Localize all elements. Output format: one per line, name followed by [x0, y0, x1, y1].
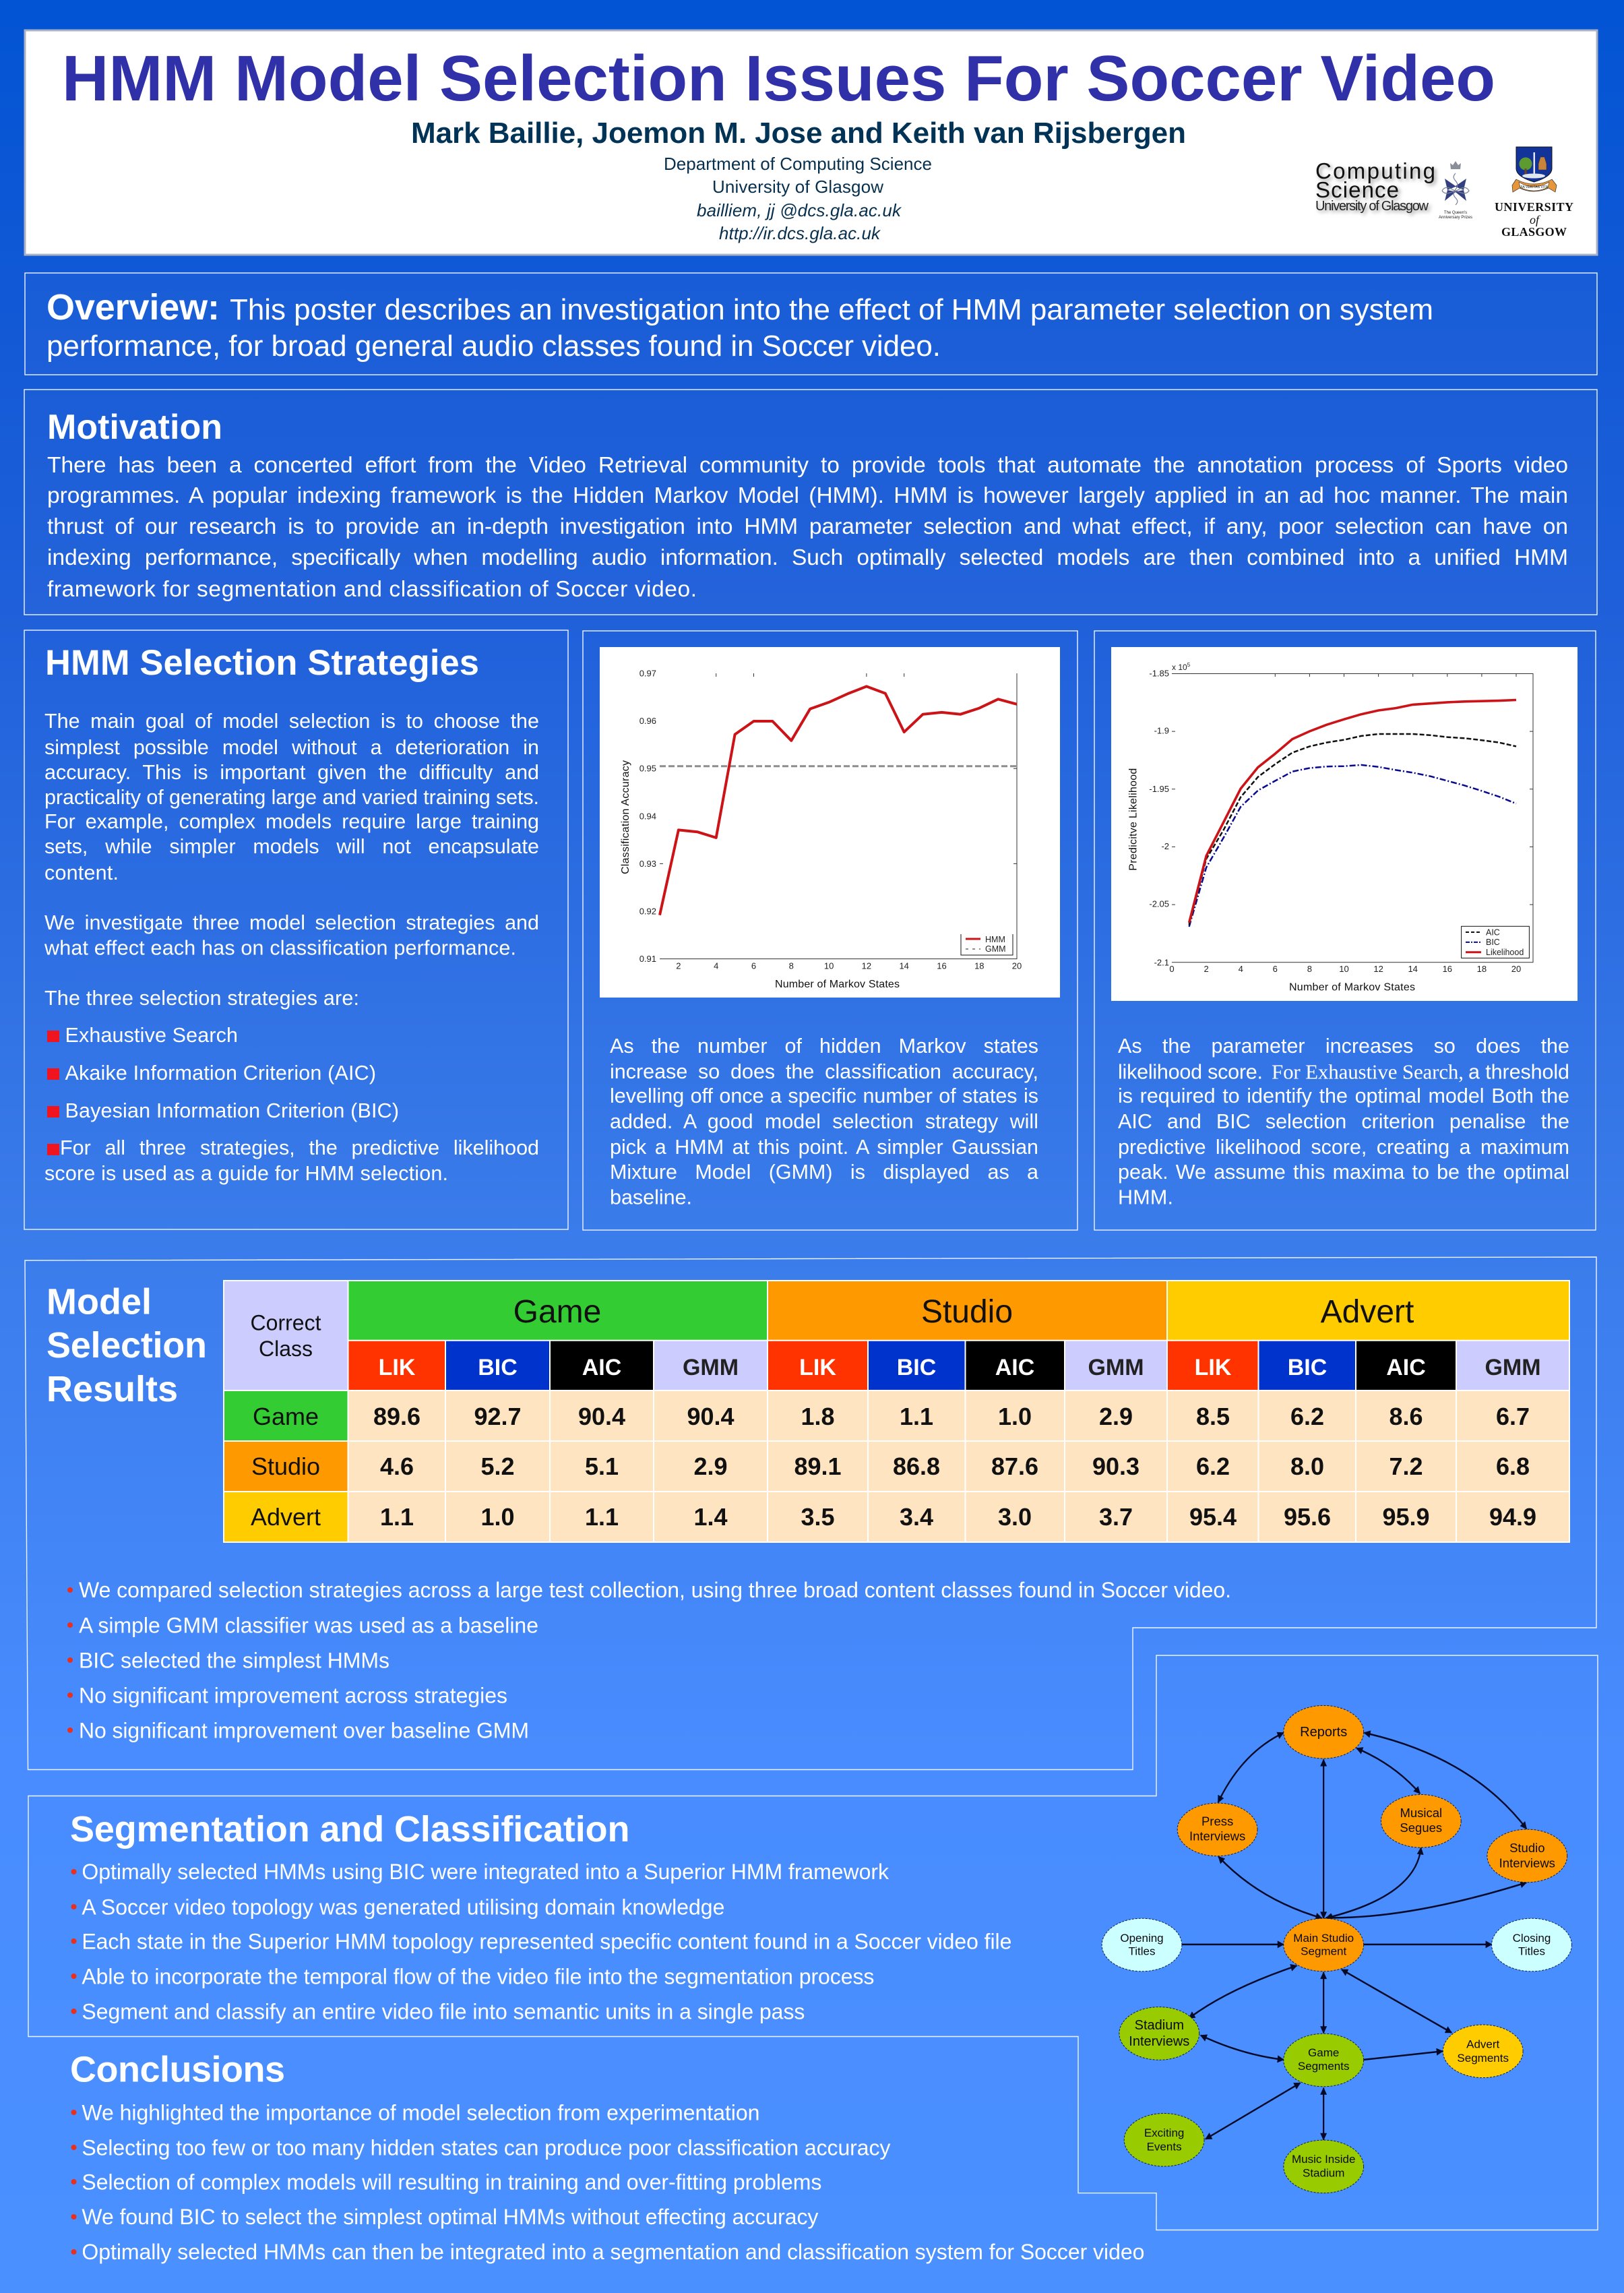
axis labels: 10 [1339, 964, 1349, 974]
strategy sub-headers: GMM [1088, 1355, 1144, 1380]
legend: BIC [1486, 938, 1500, 947]
authors: Mark Baillie, Joemon M. Jose and Keith van Rijsbergen [411, 117, 1186, 150]
logo: university of glasgow crest: of [1530, 213, 1541, 226]
row: advert: 1.1 [380, 1503, 414, 1531]
line chart: accuracy vs markov states [600, 647, 1060, 998]
axis labels: 18 [974, 961, 985, 971]
strategies paragraph 2: what effect each has on classification performance. [44, 937, 516, 960]
results heading [46, 1282, 207, 1409]
row: game: 2.9 [1099, 1403, 1133, 1430]
section: segmentation and classification [70, 1809, 1011, 2023]
conclusions bullet list: We found BIC to select the simplest optimal HMMs without effecting accuracy [82, 2205, 818, 2229]
results bullet list: No significant improvement over baseline GMM [79, 1719, 529, 1743]
segmentation bullet list: Optimally selected HMMs using BIC were integrated into a Superior HMM framework [82, 1860, 889, 1884]
strategy sub-headers [348, 1341, 1569, 1390]
group headers: Advert [1321, 1294, 1414, 1330]
axis labels: 0.93 [639, 859, 656, 869]
node: closing titles: Closing [1513, 1932, 1551, 1945]
axis labels: 8 [1307, 964, 1312, 974]
strategy sub-headers: GMM [683, 1355, 739, 1380]
caption: likelihood chart: is required to identify the optimal model Both the [1118, 1084, 1569, 1107]
node: studio interviews [1487, 1829, 1567, 1883]
motivation text: There has been a concerted effort from the Video Retrieval community to provide tools that automate the annotation process of Sports video [47, 453, 1568, 478]
row: studio: 6.2 [1196, 1453, 1230, 1480]
results heading: Model [46, 1282, 152, 1322]
caption: likelihood chart: For Exhaustive Search, [1272, 1060, 1464, 1084]
strategy sub-headers: LIK [379, 1355, 416, 1380]
bullet: predictive likelihood note: For all three strategies, the predictive likelihood [60, 1136, 539, 1159]
strategies paragraph 1: simplest possible model without a deterioration in [44, 736, 539, 759]
axis labels: -1.95 [1149, 784, 1169, 794]
conclusions bullet list [71, 2100, 1144, 2264]
legend: Likelihood [1486, 948, 1524, 957]
strategy sub-headers: LIK [799, 1355, 836, 1380]
axis labels: -2 [1161, 841, 1169, 851]
results heading: Results [46, 1369, 178, 1409]
affiliation: http://ir.dcs.gla.ac.uk [719, 223, 881, 243]
row: game: 6.2 [1290, 1403, 1324, 1430]
axis labels: 4 [1239, 964, 1243, 974]
row: advert [380, 1503, 1536, 1531]
row: studio: 5.2 [480, 1453, 515, 1480]
segmentation bullet list: Segment and classify an entire video file into semantic units in a single pass [82, 1999, 805, 2023]
axis labels: 14 [1408, 964, 1418, 974]
network diagram: superior hmm topology [1102, 1705, 1571, 2193]
axis labels: -1.85 [1149, 669, 1169, 678]
node: game segments [1284, 2034, 1364, 2087]
axis labels: 0.91 [639, 954, 656, 964]
strategies paragraph 1: content. [44, 861, 119, 884]
axis labels: 16 [1443, 964, 1452, 974]
node: game segments: Segments [1298, 2060, 1349, 2073]
row: game: 8.5 [1196, 1403, 1230, 1430]
row: studio: 8.0 [1290, 1453, 1324, 1480]
strategies list [44, 987, 539, 1185]
row: game: 6.7 [1496, 1403, 1530, 1430]
caption: accuracy chart [610, 1034, 1038, 1209]
row: advert: 95.9 [1382, 1503, 1430, 1531]
axis labels: 20 [1012, 961, 1022, 971]
conclusions bullet list: Selecting too few or too many hidden states can produce poor classification accuracy [82, 2135, 890, 2160]
strategy sub-headers: BIC [478, 1355, 518, 1380]
node: studio interviews: Studio [1509, 1841, 1545, 1855]
row: game: 92.7 [474, 1403, 522, 1430]
results heading: Selection [46, 1325, 207, 1366]
row: advert: 1.4 [693, 1503, 728, 1531]
row: studio: 4.6 [380, 1453, 414, 1480]
row: advert: 3.0 [998, 1503, 1032, 1531]
row: advert: 3.5 [801, 1503, 835, 1531]
row headers [224, 1390, 348, 1542]
logo: queen's anniversary prize emblem: Anniversary Prizes [1439, 216, 1472, 220]
strategies heading: HMM Selection Strategies [45, 643, 479, 683]
node: musical segues: Musical [1400, 1806, 1442, 1820]
row: game: 1.1 [900, 1403, 933, 1430]
node: press interviews: Interviews [1189, 1829, 1245, 1843]
caption: likelihood chart: As the parameter increases so does the [1118, 1035, 1569, 1058]
group headers [348, 1281, 1569, 1341]
affiliation [664, 154, 932, 243]
axis labels: 6 [751, 961, 756, 971]
row: advert: 3.7 [1099, 1503, 1133, 1531]
axis labels: -2.05 [1149, 899, 1169, 909]
results table [224, 1281, 1569, 1542]
logo: university of glasgow crest: GLASGOW [1501, 225, 1567, 239]
segmentation bullet list: Each state in the Superior HMM topology represented specific content found in a Soccer video file [82, 1930, 1011, 1954]
node: studio interviews: Interviews [1499, 1856, 1555, 1870]
strategy sub-headers: AIC [1386, 1355, 1426, 1380]
node: musical segues: Segues [1400, 1821, 1442, 1835]
row: studio: 86.8 [893, 1453, 940, 1480]
row: studio: 5.1 [585, 1453, 619, 1480]
axis labels: 0.95 [639, 764, 656, 774]
segmentation bullet list: Able to incorporate the temporal flow of the video file into the segmentation process [82, 1965, 874, 1989]
panel: segmentation, conclusions and topology outline [28, 1655, 1598, 2230]
node: press interviews [1177, 1803, 1257, 1856]
caption: likelihood chart: HMM. [1118, 1186, 1173, 1209]
strategies paragraph 1: The main goal of model selection is to choose the [44, 710, 539, 733]
node: music inside stadium [1284, 2140, 1364, 2193]
row: game: 89.6 [373, 1403, 420, 1430]
node: main studio segment: Main Studio [1293, 1932, 1354, 1945]
panel: overview [25, 273, 1597, 375]
segmentation heading: Segmentation and Classification [70, 1809, 629, 1849]
conclusions bullet list: Selection of complex models will resulting in training and over-fitting problems [82, 2170, 821, 2195]
bullet: predictive likelihood note: score is used as a guide for HMM selection. [44, 1162, 448, 1185]
axis labels: -1.9 [1154, 725, 1169, 735]
bullet: bic: Bayesian Information Criterion (BIC) [65, 1099, 399, 1122]
section: conclusions [70, 2049, 1144, 2264]
logo: computing science: Computing [1315, 158, 1435, 183]
axis labels: 0.94 [639, 811, 656, 821]
motivation text: programmes. A popular indexing framework is the Hidden Markov Model (HMM). HMM is however largely applied in an ad hoc manner. The main [47, 483, 1568, 508]
row: game: 90.4 [687, 1403, 735, 1430]
logo: university of glasgow crest: UNIVERSITY [1495, 200, 1573, 214]
strategies paragraph 1: accuracy. This is important given the difficulty and [44, 761, 539, 784]
axis labels: 18 [1477, 964, 1487, 974]
caption: likelihood chart: predictive likelihood score, creating a maximum [1118, 1136, 1569, 1159]
axis labels: 14 [899, 961, 909, 971]
segmentation bullet list [71, 1860, 1011, 2023]
legend [1462, 926, 1529, 958]
node: opening titles: Titles [1128, 1945, 1155, 1957]
strategies paragraph 2: We investigate three model selection strategies and [44, 911, 539, 934]
axis labels: 12 [862, 961, 871, 971]
row: advert: 1.1 [585, 1503, 619, 1531]
logo: computing science: University of Glasgow [1315, 199, 1429, 214]
conclusions bullet list: We highlighted the importance of model selection from experimentation [82, 2100, 759, 2124]
axis labels: 4 [714, 961, 718, 971]
axis labels: Number of Markov States [775, 979, 900, 990]
axis labels: x 10 [1172, 663, 1187, 672]
overview heading: Overview: [46, 287, 220, 328]
overview text: This poster describes an investigation into the effect of HMM parameter selection on system [230, 293, 1433, 326]
strategy sub-headers: GMM [1485, 1355, 1541, 1380]
row: studio [380, 1453, 1530, 1480]
row: game: 90.4 [578, 1403, 625, 1430]
strategy sub-headers: AIC [995, 1355, 1034, 1380]
motivation text: indexing performance, specifically when modelling audio information. Such optimally selected models are then combined into a unified HMM [47, 545, 1568, 570]
logo: computing science: Science [1315, 177, 1399, 202]
logo: university of glasgow crest [1495, 147, 1573, 239]
axis labels: 0.97 [639, 669, 656, 678]
caption: likelihood chart: AIC and BIC selection criterion penalise the [1118, 1110, 1569, 1133]
row: studio: 7.2 [1389, 1453, 1423, 1480]
legend: GMM [985, 944, 1006, 954]
node: advert segments: Segments [1457, 2052, 1509, 2065]
conclusions heading: Conclusions [70, 2049, 285, 2089]
row: advert: 3.4 [900, 1503, 933, 1531]
header panel [25, 30, 1597, 255]
hmm line [660, 686, 1017, 915]
logo: computing science [1315, 158, 1435, 214]
node: exciting events: Exciting [1144, 2127, 1184, 2139]
aic curve [1189, 734, 1516, 925]
strategy sub-headers: LIK [1195, 1355, 1232, 1380]
axis labels: -2.1 [1154, 957, 1169, 967]
axis labels: 2 [676, 961, 681, 971]
node: musical segues [1381, 1794, 1461, 1847]
panel: hmm selection strategies [24, 630, 568, 1229]
node: main studio segment [1284, 1918, 1364, 1971]
node: closing titles [1492, 1918, 1571, 1971]
axis labels: Number of Markov States [1289, 982, 1415, 993]
row: game: 8.6 [1389, 1403, 1423, 1430]
node: opening titles: Opening [1120, 1932, 1164, 1945]
row headers: Advert [251, 1503, 321, 1531]
node: press interviews: Press [1201, 1814, 1233, 1829]
arrows [1182, 1733, 1526, 2140]
node: opening titles [1102, 1918, 1182, 1971]
affiliation: Department of Computing Science [664, 154, 932, 174]
node: reports: Reports [1300, 1725, 1347, 1740]
likelihood curve [1189, 700, 1516, 923]
row: advert: 95.4 [1189, 1503, 1237, 1531]
node: advert segments [1443, 2025, 1523, 2078]
axis labels: 0.96 [639, 716, 656, 726]
axis labels: Predicitve Likelihood [1128, 768, 1139, 871]
caption: accuracy chart: pick a HMM at this point. A simpler Gaussian [610, 1136, 1038, 1159]
correct class header: Class [259, 1337, 313, 1361]
caption: accuracy chart: baseline. [610, 1186, 692, 1209]
row: advert: 1.0 [480, 1503, 515, 1531]
bic curve [1189, 765, 1516, 927]
results bullet list: No significant improvement across strategies [79, 1684, 507, 1708]
overview text: performance, for broad general audio classes found in Soccer video. [46, 330, 941, 363]
node: music inside stadium: Stadium [1303, 2166, 1344, 2179]
caption: likelihood chart: a threshold [1468, 1061, 1569, 1084]
results bullet list [67, 1578, 1231, 1743]
caption: accuracy chart: Mixture Model (GMM) is displayed as a [610, 1161, 1038, 1184]
row: studio: 87.6 [991, 1453, 1038, 1480]
affiliation: bailliem, jj @dcs.gla.ac.uk [697, 200, 902, 220]
axis labels [1128, 662, 1521, 993]
axis labels: 12 [1373, 964, 1383, 974]
line chart: likelihood vs markov states [1111, 647, 1578, 1001]
caption: accuracy chart: levelling off once a specific number of states is [610, 1084, 1038, 1107]
strategy sub-headers: AIC [582, 1355, 621, 1380]
bullet: exhaustive search: Exhaustive Search [65, 1024, 238, 1047]
row: studio: 89.1 [794, 1453, 842, 1480]
correct class header [224, 1281, 348, 1390]
legend: AIC [1486, 927, 1500, 937]
caption: accuracy chart: As the number of hidden Markov states [610, 1035, 1038, 1058]
caption: accuracy chart: increase so does the classification accuracy, [610, 1060, 1038, 1083]
axis labels: 8 [789, 961, 794, 971]
caption: likelihood chart [1118, 1034, 1569, 1209]
axis labels: 5 [1187, 662, 1191, 668]
panel: classification accuracy chart [583, 631, 1078, 1230]
node: stadium interviews [1119, 2007, 1199, 2060]
node: reports [1284, 1705, 1364, 1759]
caption: likelihood chart: peak. We assume this maxima to be the optimal [1118, 1161, 1569, 1184]
row: advert: 94.9 [1489, 1503, 1536, 1531]
results bullet list: A simple GMM classifier was used as a baseline [79, 1613, 538, 1637]
legend: HMM [985, 935, 1005, 944]
strategies paragraph 2 [44, 911, 539, 960]
strategies list: The three selection strategies are: [44, 987, 359, 1010]
axis labels: Classification Accuracy [620, 760, 631, 874]
node: advert segments: Advert [1466, 2038, 1500, 2051]
node: music inside stadium: Music Inside [1292, 2153, 1355, 2166]
affiliation: University of Glasgow [712, 177, 883, 197]
motivation text: thrust of our research is to provide an in-depth investigation into HMM parameter selection and what effect, if any, poor selection can have on [47, 514, 1568, 539]
results bullet list: We compared selection strategies across a large test collection, using three broad content classes found in Soccer video. [79, 1578, 1231, 1602]
results bullet list: BIC selected the simplest HMMs [79, 1649, 389, 1673]
caption: accuracy chart: added. A good model selection strategy will [610, 1110, 1038, 1133]
row: studio: 2.9 [693, 1453, 728, 1480]
row: advert: 95.6 [1284, 1503, 1331, 1531]
axis labels: 10 [824, 961, 834, 971]
conclusions bullet list: Optimally selected HMMs can then be integrated into a segmentation and classification system for Soccer video [82, 2240, 1144, 2264]
motivation heading: Motivation [47, 408, 222, 447]
row headers: Studio [251, 1453, 320, 1480]
strategies paragraph 1: For example, complex models require large training [44, 810, 539, 833]
row: game: 1.8 [801, 1403, 835, 1430]
node: main studio segment: Segment [1301, 1945, 1346, 1957]
title: HMM Model Selection Issues For Soccer Video [62, 42, 1495, 115]
row: game [373, 1403, 1530, 1430]
correct class header: Correct [251, 1310, 321, 1335]
legend [961, 934, 1013, 955]
node: exciting events: Events [1147, 2140, 1182, 2153]
motivation text: framework for segmentation and classification of Soccer video. [47, 577, 697, 602]
axis labels: 0.92 [639, 906, 656, 917]
group headers: Game [513, 1294, 601, 1330]
strategy sub-headers: BIC [897, 1355, 936, 1380]
row: studio: 6.8 [1496, 1453, 1530, 1480]
axis labels: 2 [1204, 964, 1209, 974]
caption: likelihood chart: likelihood score. [1118, 1061, 1263, 1084]
logo: queen's anniversary prize emblem: The Queen's [1444, 211, 1467, 215]
row headers: Game [253, 1403, 319, 1430]
axis labels: 6 [1273, 964, 1278, 974]
axis labels [620, 669, 1022, 990]
strategies paragraph 1 [44, 709, 539, 884]
node: stadium interviews: Stadium [1135, 2018, 1184, 2033]
motivation text [47, 452, 1568, 602]
strategies paragraph 1: sets, while simpler models will not encapsulate [44, 835, 539, 858]
bullet: predictive likelihood note [44, 1136, 539, 1185]
overview text [46, 293, 1433, 363]
axis labels: 20 [1511, 964, 1521, 974]
panel: predictive likelihood chart [1094, 631, 1596, 1230]
strategy sub-headers: BIC [1288, 1355, 1327, 1380]
panel: motivation [24, 390, 1597, 615]
logo: university of glasgow crest: VIA VERITAS VITA [1520, 185, 1549, 189]
strategies paragraph 1: practicality of generating large and varied training sets. [44, 786, 539, 809]
bullet: aic: Akaike Information Criterion (AIC) [65, 1062, 376, 1084]
node: closing titles: Titles [1518, 1945, 1545, 1957]
row: game: 1.0 [998, 1403, 1032, 1430]
node: exciting events [1124, 2114, 1204, 2166]
axis labels: 0 [1169, 964, 1175, 974]
group headers: Studio [921, 1294, 1013, 1330]
row: studio: 90.3 [1092, 1453, 1139, 1480]
segmentation bullet list: A Soccer video topology was generated utilising domain knowledge [82, 1895, 724, 1919]
gmm baseline [660, 765, 1017, 767]
panel: model selection results [25, 1257, 1596, 1770]
logo: queen's anniversary prize emblem [1439, 161, 1472, 220]
node: game segments: Game [1308, 2046, 1339, 2059]
axis labels: 16 [937, 961, 947, 971]
node: stadium interviews: Interviews [1129, 2034, 1189, 2049]
